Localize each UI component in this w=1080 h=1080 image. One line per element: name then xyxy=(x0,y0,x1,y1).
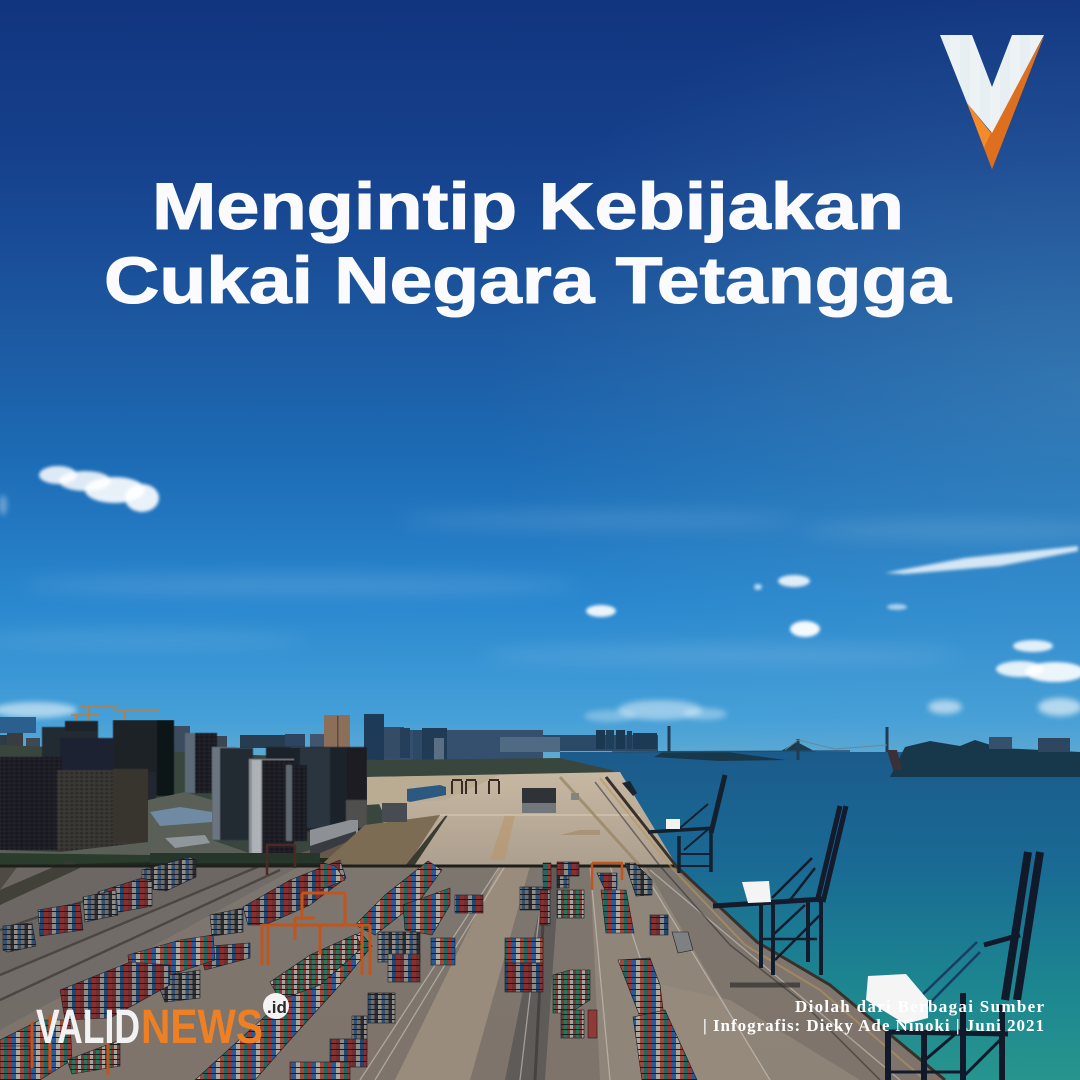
source credit: | Infografis: Dieky Ade Ninoki | Juni 2021 xyxy=(703,1016,1044,1035)
brand logo: V mark xyxy=(940,35,1044,169)
sky background xyxy=(0,0,1080,775)
ship-to-shore crane 2 xyxy=(713,806,846,985)
low-rise district and green strip xyxy=(0,792,440,866)
land strip behind port xyxy=(0,745,620,866)
validnews logo: VALID xyxy=(36,1001,140,1054)
validnews logo: NEWS xyxy=(141,1001,263,1054)
dock edge xyxy=(595,777,945,1080)
validnews logo: .id xyxy=(267,998,287,1017)
construction cranes xyxy=(71,706,160,740)
ship-to-shore crane 3 xyxy=(866,852,1040,1080)
far shore and bridge xyxy=(540,726,1080,777)
source credit xyxy=(703,997,1044,1035)
skyline behind port xyxy=(0,714,560,762)
container stacks xyxy=(0,857,697,1080)
title xyxy=(104,169,952,317)
validnews logo xyxy=(36,993,289,1054)
source credit: Diolah dari Berbagai Sumber xyxy=(795,997,1044,1016)
lower container yard ground xyxy=(0,860,945,1080)
ship-to-shore crane 1 xyxy=(648,775,725,873)
buildings xyxy=(0,720,367,855)
clouds xyxy=(0,466,1080,722)
title: Cukai Negara Tetangga xyxy=(104,243,952,317)
title: Mengintip Kebijakan xyxy=(152,169,904,243)
orange gantry cranes xyxy=(32,845,623,1075)
upper beige port yard xyxy=(320,772,677,866)
sea xyxy=(560,752,1080,1080)
